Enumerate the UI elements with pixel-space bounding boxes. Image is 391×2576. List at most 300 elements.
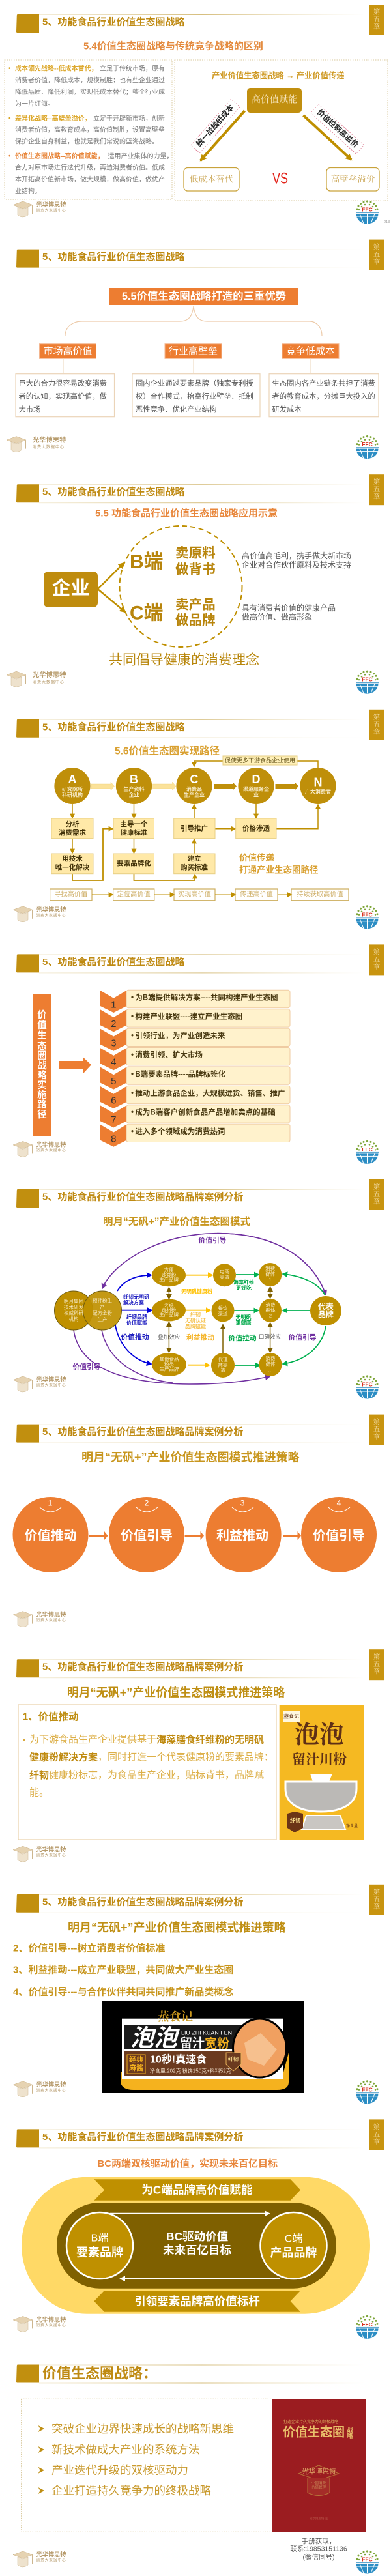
chevron numbers: 6 xyxy=(111,1095,116,1107)
C end: C端 xyxy=(130,602,164,624)
panel: value transfer diagram: 低成本替代 xyxy=(190,173,234,184)
logo: FFC: FFC xyxy=(362,1382,373,1388)
step text: • B端要素品牌----品牌标签化 xyxy=(131,1069,225,1078)
producer labels: 生产品牌 xyxy=(159,1366,179,1372)
heading box: 5.5 xyxy=(109,288,298,305)
strategy list xyxy=(13,1942,233,1998)
panel: value push text: 能。 xyxy=(29,1787,49,1799)
blue arrows xyxy=(115,1275,152,1364)
circle B xyxy=(116,768,152,804)
panel: book benefits: 新技术做成大产业的系统方法 xyxy=(51,2443,199,2456)
yellow arrows xyxy=(186,1275,212,1365)
flow labels: 纤韧 xyxy=(190,1311,201,1318)
B end: 企业对合作伙伴原料及技术支持 xyxy=(242,560,351,570)
channel labels: 电商 xyxy=(220,1268,229,1275)
column: competition cost xyxy=(269,344,379,417)
chapter tab: 第五章 xyxy=(373,8,381,31)
flow labels: 价值引导 xyxy=(198,1236,227,1245)
panel: slide 3 application diagram xyxy=(7,474,384,694)
panel: value push text: 纤韧健康粉标志，为食品生产企业，贴标背书，品牌赋 xyxy=(29,1769,264,1780)
panel: three strategies text: 合力对原市场进行迭代升级，再造消费者价值。低成 xyxy=(15,163,165,172)
logo: FFC xyxy=(356,905,379,929)
column: market value: 巨大的合力很容易改变消费 xyxy=(18,379,107,388)
circle A: A xyxy=(68,773,77,786)
header bar: 5、功能食品行业价值生态圈战略品牌案例分析 xyxy=(42,2131,243,2143)
consumer labels: 1 xyxy=(269,1276,272,1282)
panel: value transfer diagram: 价值控制高溢价 xyxy=(315,108,360,150)
channel labels: 代理 xyxy=(218,1356,228,1363)
image: product lid: 蒸食记 xyxy=(158,2010,193,2023)
header bar xyxy=(16,1659,365,1678)
logo: Guanghua: 光华博思特 xyxy=(33,436,66,444)
flow labels: 解决方案 xyxy=(123,1299,144,1306)
logo: Guanghua xyxy=(13,1845,66,1862)
logo: Guanghua: 消费大数据中心 xyxy=(36,912,66,918)
header bar xyxy=(16,1894,365,1913)
panel: value push text: 1、价值推动 xyxy=(22,1711,79,1723)
B end: 卖原料 xyxy=(175,546,216,560)
logo: Guanghua xyxy=(13,2315,66,2332)
image: red book cover: 中国消费 xyxy=(311,2480,326,2485)
step 1 circle xyxy=(13,1497,89,1572)
box: enterprise: 企业 xyxy=(51,577,90,599)
header bar xyxy=(16,2129,365,2148)
node: C end: C端 xyxy=(285,2233,302,2244)
step 2 circle xyxy=(109,1497,184,1572)
circle B: B xyxy=(130,773,138,786)
outer pill xyxy=(22,2177,370,2314)
column: industry barrier: 行业高壁垒 xyxy=(169,345,218,357)
source venn circles: 明月集团 xyxy=(64,1298,83,1305)
flow labels: 更好吃 xyxy=(236,1284,252,1291)
logo: Guanghua: 消费大数据中心 xyxy=(33,680,65,685)
contact note: (微信同号) xyxy=(302,2553,335,2562)
consumer labels: 消费 xyxy=(266,1301,276,1308)
contact note xyxy=(290,2537,347,2562)
C end: 做品牌 xyxy=(175,613,216,628)
step labels: 要素品牌化 xyxy=(117,859,151,867)
header bar xyxy=(16,2364,365,2384)
column: market value: 市场高价值 xyxy=(43,345,93,357)
ecosystem diagram xyxy=(55,1234,341,1384)
chapter tab xyxy=(369,1179,384,1210)
panel: three strategies text: 消费者价值，降低成本，规模制胜；也有些企业通过 xyxy=(15,76,165,85)
header bar xyxy=(16,954,365,973)
circle D: D xyxy=(252,773,261,786)
producer labels: 生产品牌 xyxy=(159,1311,179,1318)
contact note: 联系:19853151136 xyxy=(290,2545,347,2553)
flow labels: 价值引导 xyxy=(72,1362,101,1371)
heading: strategy: 明月“无矾+”产业价值生态圈模式推进策略 xyxy=(81,1451,300,1464)
node: C end xyxy=(261,2212,327,2279)
logo: FFC xyxy=(356,2315,379,2339)
logo: FFC xyxy=(356,2080,379,2104)
panel: slide 2 triple advantage xyxy=(7,240,384,459)
logo: Guanghua: 光华博思特 xyxy=(36,1611,66,1618)
circle N xyxy=(300,768,336,804)
step labels: 主导一个 xyxy=(120,820,148,828)
image: red book cover: 光华博思特 xyxy=(302,2467,336,2476)
circle D: 渠道服务企 xyxy=(243,786,269,792)
chapter tab xyxy=(369,1649,384,1680)
channel labels: 商渠 xyxy=(218,1362,228,1368)
source venn circles: 技术研发 xyxy=(64,1303,83,1310)
step text: • 构建产业联盟----建立产业生态圈 xyxy=(131,1012,242,1021)
panel: value transfer diagram: 统一战线低成本 xyxy=(194,102,236,149)
box: enterprise xyxy=(44,572,98,607)
chapter tab xyxy=(369,5,384,35)
B end xyxy=(130,546,351,577)
logo: Guanghua: 光华博思特 xyxy=(36,906,66,913)
connecting arrows xyxy=(89,1531,301,1540)
producer labels: 方便 xyxy=(164,1267,174,1273)
producer labels xyxy=(159,1267,179,1372)
chevron numbers: 4 xyxy=(111,1057,116,1068)
column: industry barrier: 恶性竞争、优化产业结构 xyxy=(136,405,216,414)
logo: FFC: FFC xyxy=(362,2086,373,2092)
chapter tab: 第五章 xyxy=(373,948,381,970)
panel: three strategies text: 业结构。 xyxy=(15,186,41,195)
flow labels: 口碑效应 xyxy=(259,1333,281,1340)
header bar xyxy=(16,719,365,738)
circle A xyxy=(54,768,91,804)
logo: Guanghua: 消费大数据中心 xyxy=(36,1148,66,1153)
C end: 做高价值、做高形象 xyxy=(242,612,312,622)
chevron numbers: 5 xyxy=(111,1076,116,1087)
image: product lid: 经典 xyxy=(129,2055,143,2064)
panel: value push text: • xyxy=(22,1734,26,1744)
logo: Guanghua xyxy=(7,671,66,687)
producer labels: 粉类 xyxy=(164,1361,174,1367)
source venn circles: 权威科研 xyxy=(64,1310,83,1316)
panel: three strategies text: 消费者价值，高教育成本，高价值制胜，设置高壁垒 xyxy=(15,125,165,134)
chapter tab: 第五章 xyxy=(373,712,381,736)
panel: value transfer diagram: 高壁垒溢价 xyxy=(331,173,375,184)
bottom ribbon xyxy=(94,2291,300,2312)
flow labels: 海藻纤维 xyxy=(233,1279,254,1285)
logo: Guanghua xyxy=(13,1140,66,1157)
flow labels: 纤韧无明矾 xyxy=(123,1294,149,1300)
logo: Guanghua: 光华博思特 xyxy=(36,2081,66,2088)
column: competition cost: 竞争低成本 xyxy=(286,345,335,357)
channel labels: 道 xyxy=(220,1367,225,1374)
producer labels: 食材粉 xyxy=(162,1306,177,1312)
node: representative brand: 品牌 xyxy=(318,1310,334,1320)
heading: strategy: 明月“无矾+”产业价值生态圈模式推进策略 xyxy=(68,1920,286,1934)
column: competition cost: 生态圈内各产业链条共担了消费 xyxy=(272,379,375,388)
panel: value push text: 健康粉解决方案，同时打造一个代表健康粉的要素品牌： xyxy=(29,1751,274,1763)
step labels: 健康标准 xyxy=(120,828,148,837)
image: product package: 纤韧 xyxy=(290,1817,300,1823)
image: product lid: 泡泡 xyxy=(130,2024,181,2051)
node: representative brand: 代表 xyxy=(318,1301,334,1311)
consumer labels: … xyxy=(268,1367,273,1374)
logo: Guanghua: 光华博思特 xyxy=(36,1140,66,1148)
circle N: 广大消费者 xyxy=(305,789,331,795)
logo: Guanghua: 消费大数据中心 xyxy=(36,2323,66,2328)
logo: Guanghua xyxy=(13,2551,66,2567)
image: product package xyxy=(280,1705,364,1840)
image: product package: 留汁川粉 xyxy=(292,1752,347,1767)
chevron numbers: 3 xyxy=(111,1037,116,1049)
circle C: 消费品 xyxy=(186,786,202,792)
flow labels: 无矾认证 xyxy=(185,1317,206,1324)
chapter tab xyxy=(369,240,384,270)
producer labels: 速食粉 xyxy=(162,1271,177,1278)
step 4 circle: 价值引导 xyxy=(313,1528,365,1543)
panel: value transfer diagram xyxy=(175,60,388,201)
header bar: 5、功能食品行业价值生态圈战略 xyxy=(42,486,184,498)
image: red book cover: 价值生态圈 xyxy=(283,2424,345,2440)
heading: 5.6: 5.6价值生态圈实现路径 xyxy=(115,744,220,757)
chapter tab: 第五章 xyxy=(373,2122,381,2145)
node: B end xyxy=(66,2212,133,2279)
B end: B端 xyxy=(130,551,164,572)
panel: slide 11 value ecosystem book xyxy=(13,2364,379,2574)
step text: • 推动上游食品企业，大规模进货、销售、推广 xyxy=(131,1088,285,1097)
panel: slide 10 BC dual core xyxy=(13,2119,384,2339)
panel: value push text xyxy=(18,1705,276,1840)
header bar: 5、功能食品行业价值生态圈战略品牌案例分析 xyxy=(42,1661,243,1673)
circle A: 研究院所 xyxy=(62,786,83,792)
dashed ring xyxy=(120,526,242,647)
center text xyxy=(163,2230,231,2257)
consumer labels: 消费 xyxy=(265,1265,276,1271)
circle C: 生产企业 xyxy=(184,791,205,798)
step 1 circle: 1 xyxy=(48,1499,53,1508)
flow labels: 叠加效应 xyxy=(158,1334,181,1340)
step rows xyxy=(126,990,290,1142)
image: red book cover: 价值管理 xyxy=(311,2485,326,2490)
image: product lid: 留汁宽粉 xyxy=(180,2036,229,2050)
panel: value push text: 为下游食品生产企业提供基于海藻膳食纤维粉的无明矾 xyxy=(29,1733,264,1745)
logo: Guanghua: 消费大数据中心 xyxy=(36,1853,66,1858)
center text: 未来百亿目标 xyxy=(163,2244,231,2257)
callout: value transfer: 打通产业生态圈路径 xyxy=(239,864,319,875)
column: industry barrier: 圈内企业通过要素品牌（独家专利授 xyxy=(136,379,253,388)
header bar xyxy=(16,14,365,33)
panel: slide 9 strategy list xyxy=(13,1885,384,2104)
panel: three strategies text: • xyxy=(8,65,11,72)
flow labels: 无明矾健康粉 xyxy=(181,1288,212,1294)
chapter tab xyxy=(369,944,384,975)
value chain row: 实现高价值 xyxy=(178,890,211,898)
flow labels xyxy=(72,1236,317,1371)
panel: three strategies text: 立足于传统市场，原有 xyxy=(100,64,165,72)
header bar xyxy=(16,484,365,503)
value chain row: 传递高价值 xyxy=(240,890,273,898)
source venn circles: 生产 xyxy=(98,1316,107,1323)
panel: value transfer diagram: VS xyxy=(272,169,288,188)
flow labels: 价值推动 xyxy=(121,1333,149,1342)
chapter tab: 第五章 xyxy=(373,478,381,500)
logo: Guanghua: 光华博思特 xyxy=(36,1376,66,1383)
image: product package: 净含量 xyxy=(346,1823,358,1829)
strategy list: 3、利益推动---成立产业联盟，共同做大产业生态圈 xyxy=(13,1964,233,1976)
logo: FFC xyxy=(356,671,379,694)
image: red book cover: 战略 xyxy=(347,2426,353,2439)
heading: BC: BC两端双核驱动价值，实现未来百亿目标 xyxy=(97,2158,278,2169)
logo: Guanghua xyxy=(7,436,66,452)
chapter tab: 第五章 xyxy=(373,242,381,266)
C end: 具有消费者价值的健康产品 xyxy=(242,603,336,613)
circle D xyxy=(238,768,274,804)
header bar: 5、功能食品行业价值生态圈战略 xyxy=(42,16,184,27)
chevrons xyxy=(100,991,126,1147)
step labels: 建立 xyxy=(188,854,201,863)
panel: slide 4 implementation path xyxy=(13,710,384,929)
logo: Guanghua: 光华博思特 xyxy=(36,2551,66,2558)
flow labels: 价值引导 xyxy=(288,1333,317,1342)
logo: Guanghua: 光华博思特 xyxy=(36,2315,66,2323)
heading: 5.4: 5.4价值生态圈战略与传统竞争战略的区别 xyxy=(83,40,263,52)
brace connector xyxy=(65,306,322,336)
panel: three strategies text: 运用产业集体的力量， xyxy=(108,151,173,160)
step labels xyxy=(55,820,270,872)
chevron numbers: 2 xyxy=(111,1019,116,1030)
callout: value transfer: 价值传递 xyxy=(239,852,274,863)
step text: • 进入多个领域成为消费热词 xyxy=(131,1127,225,1136)
panel: slide 5 implementation steps xyxy=(13,944,384,1164)
chapter tab: 第五章 xyxy=(373,1653,381,1675)
step text: • 成为B端客户创新食品产品增加卖点的基础 xyxy=(131,1108,276,1117)
image: product package: 泡泡 xyxy=(295,1722,344,1749)
logo: Guanghua xyxy=(13,906,66,922)
logo: Guanghua: 消费大数据中心 xyxy=(36,1617,66,1623)
flow labels: 价值拉动 xyxy=(228,1333,257,1342)
source venn circles: 产 xyxy=(100,1303,105,1310)
producer labels: 生产品牌 xyxy=(159,1276,179,1282)
image: red book cover: 打造企业持久竞争力的终极战略—— xyxy=(283,2419,346,2424)
logo: Guanghua: 消费大数据中心 xyxy=(36,2557,66,2562)
value chain row: 寻找高价值 xyxy=(54,890,87,898)
value chain row xyxy=(50,889,349,901)
step labels: 唯一化解决 xyxy=(55,863,90,872)
producer labels: 火锅 xyxy=(164,1301,174,1308)
panel: slide 7 promotion strategy xyxy=(13,1415,384,1627)
chapter tab: 第五章 xyxy=(373,1887,381,1911)
node: representative brand xyxy=(310,1296,341,1325)
top ribbon xyxy=(94,2179,300,2201)
page number: 213 xyxy=(384,220,390,224)
logo: Guanghua: 光华博思特 xyxy=(36,1845,66,1853)
chapter tab xyxy=(369,1885,384,1915)
header bar: 价值生态圈战略： xyxy=(42,2366,157,2381)
contact note: 手册获取， xyxy=(302,2537,336,2545)
step 3 circle xyxy=(206,1497,282,1572)
header bar xyxy=(16,1189,365,1208)
circle C xyxy=(176,768,212,804)
column: market value xyxy=(16,344,115,417)
circle B: 生产资料 xyxy=(124,786,145,792)
source venn circles: 预拌粉生 xyxy=(93,1297,112,1303)
panel: three strategies text: 价值生态圈战略--高价值赋能， xyxy=(15,151,104,160)
arrows to B and C xyxy=(98,563,125,612)
panel: three strategies text: 成本领先战略--低成本替代， xyxy=(15,64,98,72)
chapter tab xyxy=(369,710,384,740)
B end: 做背书 xyxy=(175,562,216,577)
step text: • 引领行业，为产业创造未来 xyxy=(131,1031,225,1040)
logo: Guanghua: 光华博思特 xyxy=(36,201,66,208)
panel: three strategies text: 差异化战略--高壁垒溢价， xyxy=(15,113,91,123)
purple arcs xyxy=(74,1234,326,1384)
chapter tab: 第五章 xyxy=(373,1182,381,1206)
logo: Guanghua xyxy=(13,1611,66,1627)
brown arrows xyxy=(169,1287,270,1352)
step 3 circle: 利益推动 xyxy=(216,1528,268,1543)
node: B end: B端 xyxy=(91,2233,108,2244)
logo: Guanghua: 消费大数据中心 xyxy=(33,444,65,450)
panel: three strategies text xyxy=(5,60,173,199)
heading box: 5.5: 5.5价值生态圈战略打造的三重优势 xyxy=(122,290,286,302)
consumer nodes xyxy=(259,1263,282,1376)
flow labels: 无明矾 xyxy=(236,1314,252,1320)
logo: FFC: FFC xyxy=(362,1146,373,1153)
column: market value: 者的认知，实现高价值，做 xyxy=(18,392,107,401)
chapter tab xyxy=(369,474,384,505)
header bar: 5、功能食品行业价值生态圈战略 xyxy=(42,251,184,263)
panel: three strategies text: • xyxy=(8,152,11,160)
producer nodes xyxy=(152,1264,186,1376)
image: red book cover xyxy=(272,2399,366,2532)
logo: Guanghua xyxy=(13,1376,66,1392)
image: product lid: 净含量:202克 粉饼150克+料料52克 xyxy=(150,2067,231,2074)
inner pill xyxy=(57,2203,336,2289)
step labels: 用技术 xyxy=(62,854,83,863)
chapter tab xyxy=(369,1415,384,1445)
side bar: path label xyxy=(33,994,51,1136)
producer labels: 其他食品 xyxy=(159,1355,179,1362)
source venn circles xyxy=(55,1291,121,1330)
step labels: 价格渗透 xyxy=(242,824,270,833)
heading: strategy: 明月“无矾+”产业价值生态圈模式推进策略 xyxy=(67,1686,285,1700)
C end xyxy=(130,597,336,628)
panel: book benefits: 企业打造持久竞争力的终极战略 xyxy=(51,2484,211,2497)
panel: book benefits: 突破企业边界快速成长的战略新思维 xyxy=(51,2422,234,2435)
step 3 circle: 3 xyxy=(240,1499,245,1508)
panel: value transfer diagram: 高价值赋能 xyxy=(252,94,297,106)
strategy list: 2、价值引导---树立消费者价值标准 xyxy=(13,1942,165,1954)
source venn circles: 配方全粉 xyxy=(93,1310,112,1316)
logo: FFC: FFC xyxy=(362,911,373,918)
green arrows xyxy=(234,1274,326,1365)
channel labels: 渠道 xyxy=(218,1310,228,1316)
chevron numbers: 8 xyxy=(111,1133,116,1144)
panel: three strategies text: 降低品质、降低利润，实现低成本替代；整个行业成 xyxy=(15,87,165,96)
panel: book benefits: 产业迭代升级的双核驱动力 xyxy=(51,2464,188,2477)
big arrow xyxy=(59,1058,91,1073)
logo: FFC: FFC xyxy=(362,206,373,212)
step boxes xyxy=(51,818,276,874)
logo: FFC xyxy=(356,1375,379,1398)
step 4 circle: 4 xyxy=(337,1499,341,1508)
panel: three strategies text: 为一片红海。 xyxy=(15,99,54,108)
logo: FFC xyxy=(356,435,379,459)
flow labels: 品牌赋能 xyxy=(185,1323,206,1329)
flow labels: 利益推动 xyxy=(186,1333,214,1342)
logo: FFC: FFC xyxy=(362,441,373,448)
circle N: N xyxy=(314,776,322,789)
step labels: 引导推广 xyxy=(181,824,208,833)
logo: FFC xyxy=(356,2550,379,2574)
column: industry barrier xyxy=(132,344,260,417)
header bar: 5、功能食品行业价值生态圈战略品牌案例分析 xyxy=(42,1426,243,1438)
channel labels: 渠道 xyxy=(220,1273,229,1280)
logo: Guanghua: 光华博思特 xyxy=(33,671,66,679)
channel labels xyxy=(218,1268,229,1374)
consumer labels: 群体 xyxy=(266,1361,276,1367)
bottom ribbon: 引领要素品牌高价值标杆 xyxy=(134,2295,260,2308)
